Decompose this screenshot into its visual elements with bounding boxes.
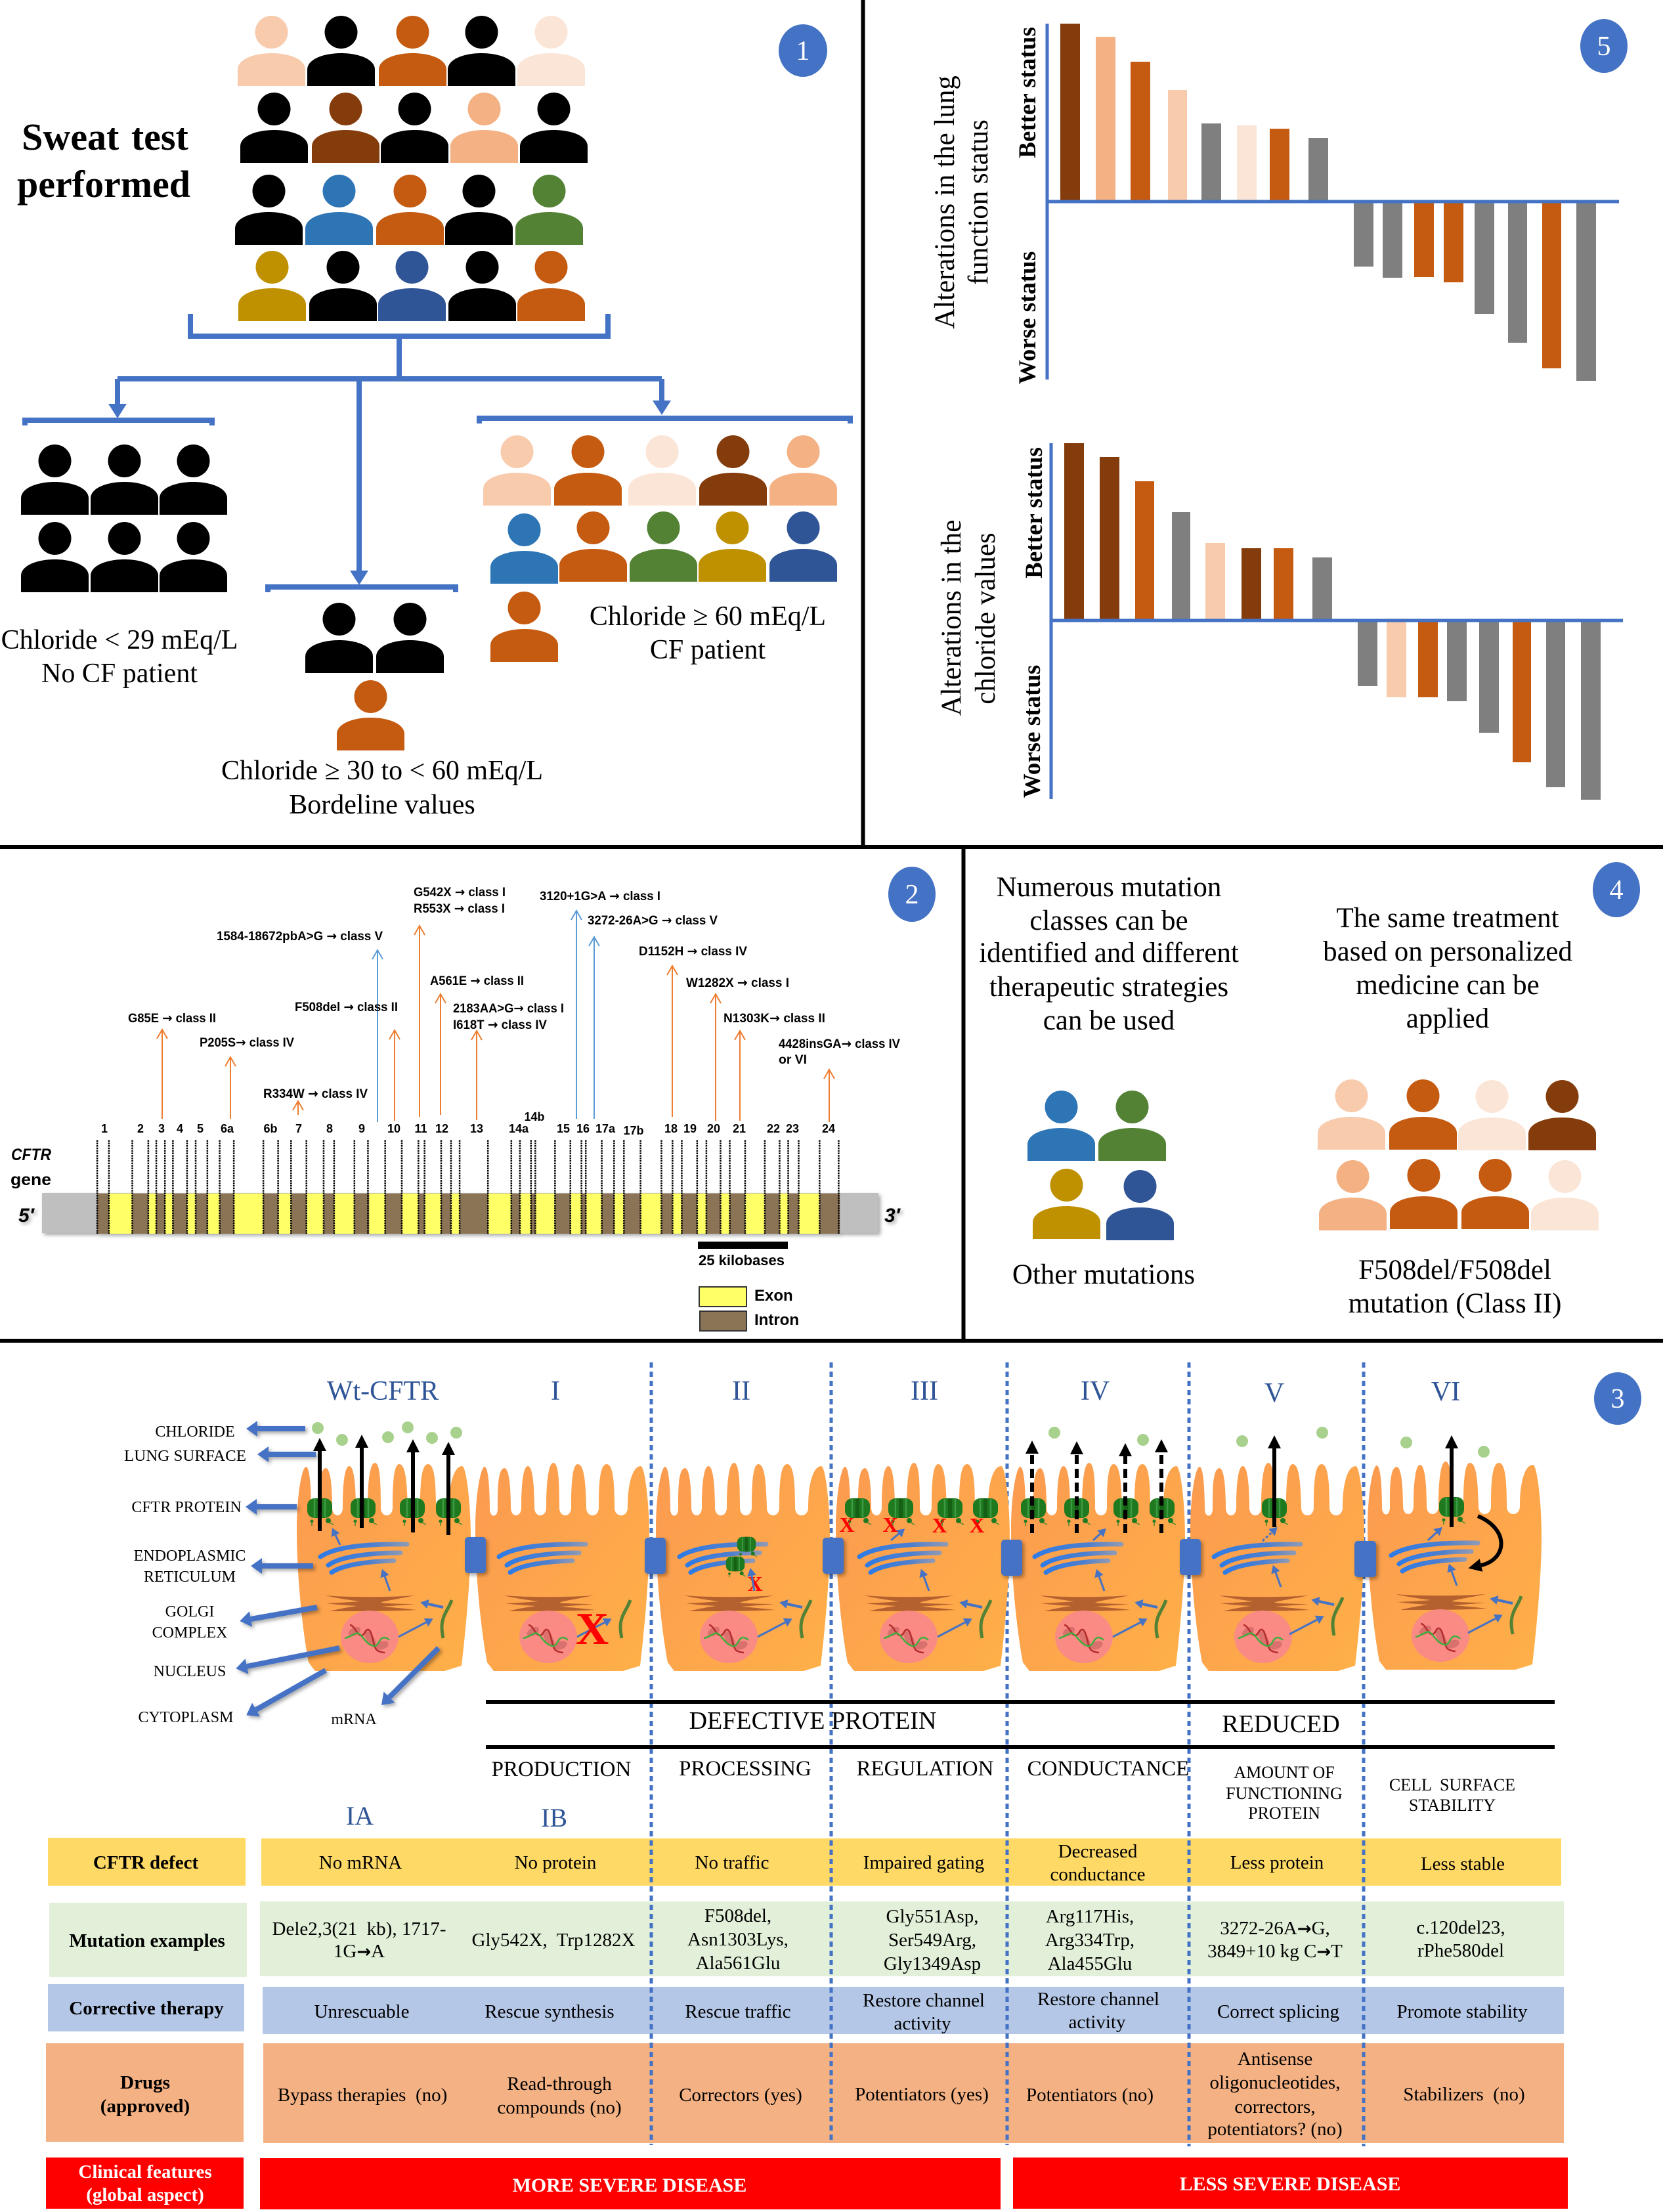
caption: F508del — [1349, 1255, 1561, 1319]
row text: drugs: oligonucleotides, — [1210, 2072, 1340, 2093]
scale bar — [698, 1242, 788, 1269]
row text: mutation examples: Ala561Glu — [696, 1953, 780, 1974]
mutation arrows blue — [378, 911, 594, 1122]
cell: class V — [1190, 1463, 1364, 1671]
3 prime label: 3′ — [884, 1205, 901, 1226]
row text: drugs: Bypass therapies (no) — [278, 2085, 447, 2106]
junctions — [465, 1537, 1376, 1577]
text: numerous mutation classes: can be used — [1043, 1005, 1175, 1036]
text: same treatment — [1323, 903, 1572, 1034]
caption: F508del: mutation (Class II) — [1349, 1288, 1561, 1319]
row text: corrective therapy: Rescue traffic — [685, 2001, 791, 2022]
row headers: (approved) — [100, 2096, 190, 2117]
chloride flow arrows: solid — [320, 1448, 1452, 1535]
row: clinical features — [46, 2158, 1568, 2209]
column headers: FUNCTIONING — [1226, 1784, 1343, 1803]
panel 2: CFTR gene map — [11, 867, 936, 1331]
cell: class IV — [1011, 1463, 1185, 1671]
5 prime label: 5′ — [18, 1205, 35, 1226]
column headers: AMOUNT OF — [1234, 1763, 1335, 1782]
row headers — [69, 1852, 225, 2205]
column headers: CELL SURFACE — [1389, 1775, 1515, 1794]
text: borderline values: Bordeline values — [289, 790, 475, 820]
badge 3 — [1594, 1372, 1641, 1425]
row text: drugs: Correctors (yes) — [679, 2085, 802, 2106]
row text: drugs: Read-through — [507, 2073, 612, 2094]
people: F508del — [1318, 1079, 1599, 1230]
exon numbers: 6a — [221, 1122, 234, 1135]
mutation labels: D1152H → class IV — [639, 944, 747, 959]
text: borderline values — [221, 756, 543, 820]
text: numerous mutation classes: classes can be — [1029, 905, 1188, 936]
exon numbers: 8 — [326, 1122, 333, 1135]
row text: mutation examples: Asn1303Lys, — [687, 1929, 788, 1950]
row text: drugs — [278, 2049, 1525, 2140]
row text: mutation examples: Dele2,3(21 kb), 1717- — [272, 1919, 446, 1940]
red defect marks: X — [932, 1513, 947, 1537]
chloride flow arrows: reduced dashed — [1032, 1452, 1161, 1533]
column headers — [492, 1757, 1515, 1823]
mutation labels: G542X → class I — [414, 885, 506, 900]
row text: CFTR defect: No traffic — [695, 1852, 769, 1873]
title: sweat test performed: Sweat test — [22, 116, 189, 158]
badge 4: 4 — [1610, 875, 1623, 905]
cell: class III — [836, 1463, 1010, 1671]
text: numerous mutation classes: Numerous mutation — [997, 872, 1221, 903]
legend — [699, 1287, 799, 1331]
panel 3: CFTR mutation classes — [46, 1362, 1641, 2209]
row text: corrective therapy — [314, 1989, 1528, 2034]
CFTR gene label: CFTR — [11, 1146, 51, 1164]
people: other mutations — [1027, 1091, 1174, 1240]
row text: CFTR defect: Less protein — [1230, 1852, 1324, 1873]
CFTR gene label — [11, 1146, 51, 1189]
row text: mutation examples: Gly542X, Trp1282X — [472, 1930, 636, 1951]
exon numbers: 22 — [767, 1122, 780, 1135]
text: numerous mutation classes: therapeutic strategies — [989, 972, 1228, 1003]
text: same treatment: The same treatment — [1336, 903, 1559, 934]
row headers: Mutation examples — [69, 1930, 225, 1951]
chart: lung function: Worse status — [1014, 251, 1041, 384]
chart: chloride values: chloride values — [970, 532, 1001, 705]
column headers: PRODUCTION — [492, 1758, 632, 1781]
exon numbers: 9 — [358, 1122, 365, 1135]
chart: chloride values: Better status — [1021, 447, 1048, 578]
cell part labels: GOLGI — [165, 1603, 214, 1620]
mutation labels: N1303K→ class II — [724, 1011, 825, 1026]
legend: Exon — [754, 1287, 793, 1305]
row: CFTR defect — [48, 1838, 1561, 1886]
chart: chloride values: Worse status — [1019, 665, 1046, 798]
row headers: (global aspect) — [86, 2184, 204, 2205]
mutation labels: R334W → class IV — [263, 1087, 368, 1101]
row: drugs — [46, 2043, 1564, 2143]
row text: CFTR defect: conductance — [1050, 1864, 1145, 1885]
column headers: PROCESSING — [679, 1757, 811, 1781]
row text: corrective therapy: activity — [1069, 2012, 1126, 2033]
column headers: REGULATION — [857, 1757, 994, 1781]
cell part labels: CFTR PROTEIN — [131, 1499, 242, 1516]
panel dividers — [0, 0, 1663, 1341]
red defect marks: X — [839, 1513, 855, 1536]
exon numbers: 14b — [524, 1110, 545, 1123]
exon numbers: 18 — [664, 1122, 678, 1135]
cell part labels: ENDOPLASMIC — [134, 1548, 246, 1565]
exon numbers: 21 — [733, 1122, 746, 1135]
chart: lung function: function status — [963, 119, 994, 285]
text: numerous mutation classes — [979, 872, 1239, 1036]
dotted class dividers — [651, 1362, 1364, 2146]
exon numbers: 12 — [435, 1122, 448, 1135]
table rows — [46, 1838, 1568, 2209]
row text: mutation examples: Arg117His, — [1046, 1906, 1134, 1927]
mutation labels: F508del → class II — [295, 1000, 398, 1014]
severity labels: MORE SEVERE DISEASE — [513, 2175, 746, 2196]
text: CF patient — [590, 601, 826, 665]
mutation labels: 1584-18672pbA>G → class V — [217, 929, 383, 943]
badge 5 — [1580, 19, 1628, 73]
mutation labels: A561E → class II — [430, 974, 524, 988]
mutation labels: 3272-26A>G → class V — [588, 913, 718, 928]
text: same treatment: applied — [1406, 1003, 1489, 1034]
badge 1 — [779, 24, 827, 77]
severity labels: LESS SEVERE DISEASE — [1180, 2173, 1400, 2195]
row text: corrective therapy: Unrescuable — [314, 2001, 409, 2022]
recycling curved arrow — [1478, 1516, 1501, 1565]
gene bar — [42, 1193, 878, 1234]
header: defective protein: DEFECTIVE PROTEIN — [689, 1707, 936, 1735]
label pointer arrows — [247, 1429, 439, 1710]
mutation arrows orange — [162, 926, 829, 1122]
text: numerous mutation classes: identified and different — [979, 938, 1239, 968]
row text: CFTR defect: Decreased — [1058, 1841, 1138, 1862]
chart: lung function: Better status — [1014, 27, 1041, 158]
chart: chloride values: Alterations in the — [936, 520, 967, 716]
mutation labels: G85E → class II — [128, 1011, 216, 1026]
row headers: Corrective therapy — [69, 1998, 224, 2019]
exon numbers: 11 — [414, 1122, 427, 1135]
class IA label: IA — [346, 1801, 374, 1831]
row: mutation examples — [49, 1901, 1564, 1977]
mutation labels: I618T → class IV — [453, 1018, 547, 1032]
row text: mutation examples: 3272-26A→G, — [1220, 1918, 1330, 1939]
mutation labels: R553X → class I — [414, 901, 505, 916]
badge 3: 3 — [1611, 1384, 1624, 1414]
exon numbers: 14a — [509, 1122, 529, 1135]
title: sweat test performed: performed — [17, 163, 190, 206]
CFTR gene label: gene — [11, 1171, 51, 1189]
exon numbers: 13 — [470, 1122, 483, 1135]
panel 4: personalized medicine — [979, 862, 1640, 1319]
row text: mutation examples: rPhe580del — [1417, 1940, 1504, 1961]
class titles: I — [551, 1376, 560, 1406]
badge 1: 1 — [796, 36, 810, 66]
mutation labels: P205S→ class IV — [200, 1035, 294, 1050]
mutation labels: 2183AA>G→ class I — [453, 1001, 564, 1016]
text: no CF patient: Chloride < 29 mEq/L — [1, 625, 238, 655]
red defect marks — [576, 1513, 985, 1655]
cell: class VI — [1368, 1462, 1542, 1670]
row text: mutation examples: Gly1349Asp — [884, 1953, 981, 1974]
chart: chloride values — [936, 443, 1623, 800]
panel 5: waterfall charts — [930, 19, 1628, 800]
exon numbers: 5 — [197, 1122, 204, 1135]
mutation labels: 3120+1G>A → class I — [540, 889, 660, 903]
row text: CFTR defect: Impaired gating — [863, 1852, 984, 1873]
text: no CF patient — [1, 625, 238, 689]
badge 5: 5 — [1597, 32, 1611, 62]
row text: corrective therapy: Correct splicing — [1217, 2001, 1339, 2022]
exon numbers: 20 — [707, 1122, 720, 1135]
class titles — [327, 1376, 1460, 1408]
red defect marks: X — [969, 1513, 985, 1537]
dashed exon boundaries — [97, 1140, 838, 1234]
row headers: CFTR defect — [93, 1852, 198, 1873]
row text: drugs: Potentiators (yes) — [855, 2084, 989, 2105]
row text: CFTR defect: No protein — [515, 1852, 597, 1873]
row text: mutation examples: Ala455Glu — [1048, 1953, 1132, 1974]
row text: mutation examples: 1G→A — [334, 1941, 385, 1962]
row text: drugs: Antisense — [1238, 2049, 1312, 2070]
chart: lung function: Alterations in the lung — [930, 76, 961, 329]
cell part labels: LUNG SURFACE — [124, 1448, 246, 1465]
text: CF patient: Chloride ≥ 60 mEq/L — [590, 601, 826, 632]
text: same treatment: based on personalized — [1323, 936, 1572, 967]
caption: F508del: F508del/F508del — [1358, 1255, 1551, 1286]
exon numbers: 7 — [295, 1122, 302, 1135]
row text: drugs: compounds (no) — [497, 2097, 622, 2118]
exon numbers: 15 — [557, 1122, 570, 1135]
cell part labels — [124, 1423, 377, 1728]
chloride dots — [312, 1421, 1490, 1458]
cell part labels: COMPLEX — [152, 1624, 227, 1641]
exon numbers: 23 — [786, 1122, 799, 1135]
row text: drugs: potentiators? (no) — [1207, 2119, 1343, 2140]
row text: mutation examples: Arg334Trp, — [1045, 1930, 1134, 1951]
row text: drugs: correctors, — [1234, 2096, 1316, 2117]
text: same treatment: medicine can be — [1356, 970, 1540, 1001]
cell part labels: RETICULUM — [144, 1569, 236, 1586]
class titles: V — [1264, 1378, 1284, 1408]
severity labels — [513, 2173, 1400, 2196]
scale bar: 25 kilobases — [699, 1252, 785, 1269]
cell: class I — [475, 1463, 649, 1671]
class IB label: IB — [541, 1803, 567, 1832]
column headers: CONDUCTANCE — [1027, 1757, 1189, 1781]
row text: CFTR defect — [319, 1841, 1505, 1885]
class titles: Wt-CFTR — [327, 1376, 439, 1406]
row text: corrective therapy: Restore channel — [1037, 1989, 1159, 2010]
red defect marks: X — [576, 1604, 609, 1655]
exon numbers: 24 — [822, 1122, 835, 1135]
row text: corrective therapy: Promote stability — [1397, 2001, 1528, 2022]
mutation labels — [128, 885, 900, 1101]
mutation labels: 4428insGA→ class IV — [779, 1037, 900, 1051]
people group: CF patients — [483, 435, 837, 662]
row text: mutation examples: 3849+10 kg C→T — [1207, 1941, 1343, 1962]
people group: borderline — [305, 603, 444, 750]
people grid: tested population — [235, 16, 588, 321]
exon numbers: 19 — [683, 1122, 697, 1135]
exon numbers: 16 — [576, 1122, 590, 1135]
row headers: Drugs — [120, 2072, 170, 2093]
badge 4 — [1593, 862, 1640, 917]
defective protein header lines — [486, 1702, 1555, 1747]
cell part labels: mRNA — [331, 1711, 377, 1728]
header: reduced: REDUCED — [1222, 1710, 1340, 1738]
column headers: PROTEIN — [1248, 1804, 1320, 1823]
row headers: Clinical features — [78, 2161, 212, 2182]
exon numbers: 6b — [263, 1122, 278, 1135]
text: CF patient: CF patient — [650, 635, 766, 665]
row text: mutation examples: Ser549Arg, — [888, 1930, 976, 1951]
class titles: IV — [1081, 1376, 1110, 1406]
red defect marks: X — [747, 1572, 763, 1595]
exon numbers: 1 — [101, 1122, 108, 1135]
row text: drugs: Potentiators (no) — [1026, 2085, 1154, 2106]
class titles: III — [911, 1376, 938, 1406]
row text: corrective therapy: Rescue synthesis — [485, 2001, 615, 2022]
row text: mutation examples — [272, 1905, 1505, 1974]
people group: no CF — [21, 445, 227, 592]
exon numbers — [101, 1110, 835, 1137]
badge 2: 2 — [905, 880, 919, 910]
row: corrective therapy — [48, 1984, 1564, 2034]
row text: corrective therapy: activity — [894, 2013, 951, 2034]
exon numbers: 4 — [177, 1122, 183, 1135]
column headers: STABILITY — [1409, 1796, 1496, 1815]
chart: lung function — [930, 24, 1619, 384]
exon numbers: 10 — [387, 1122, 400, 1135]
exon numbers: 17a — [595, 1122, 616, 1135]
text: borderline values: Chloride ≥ 30 to < 60 mEq/L — [221, 756, 543, 786]
row text: CFTR defect: No mRNA — [319, 1852, 402, 1873]
row text: drugs: Stabilizers (no) — [1403, 2084, 1525, 2105]
class titles: VI — [1431, 1377, 1460, 1407]
exon numbers: 17b — [623, 1124, 644, 1137]
cell: wild type — [297, 1463, 471, 1671]
row text: mutation examples: Gly551Asp, — [886, 1906, 978, 1927]
text: no CF patient: No CF patient — [41, 659, 198, 689]
cell: class II — [656, 1463, 830, 1671]
badge 2 — [888, 867, 936, 922]
exon numbers: 2 — [137, 1122, 144, 1135]
mutation labels: or VI — [779, 1053, 807, 1067]
red defect marks: X — [882, 1513, 898, 1536]
row text: mutation examples: F508del, — [704, 1905, 771, 1926]
caption: other mutations: Other mutations — [1012, 1259, 1195, 1290]
mutation labels: W1282X → class I — [686, 976, 789, 990]
cell part labels: NUCLEUS — [154, 1663, 226, 1680]
legend: Intron — [754, 1311, 799, 1329]
branching brackets and arrows — [25, 314, 850, 592]
title: sweat test performed — [17, 116, 190, 206]
class II blocked arrow — [752, 1576, 754, 1591]
row text: CFTR defect: Less stable — [1421, 1854, 1505, 1875]
exon numbers: 3 — [158, 1122, 165, 1135]
row text: mutation examples: c.120del23, — [1416, 1917, 1505, 1938]
class titles: II — [732, 1376, 750, 1406]
cell part labels: CHLORIDE — [155, 1423, 235, 1441]
row text: corrective therapy: Restore channel — [863, 1990, 985, 2011]
panel 1: sweat test — [1, 16, 850, 820]
cell part labels: CYTOPLASM — [139, 1709, 233, 1726]
